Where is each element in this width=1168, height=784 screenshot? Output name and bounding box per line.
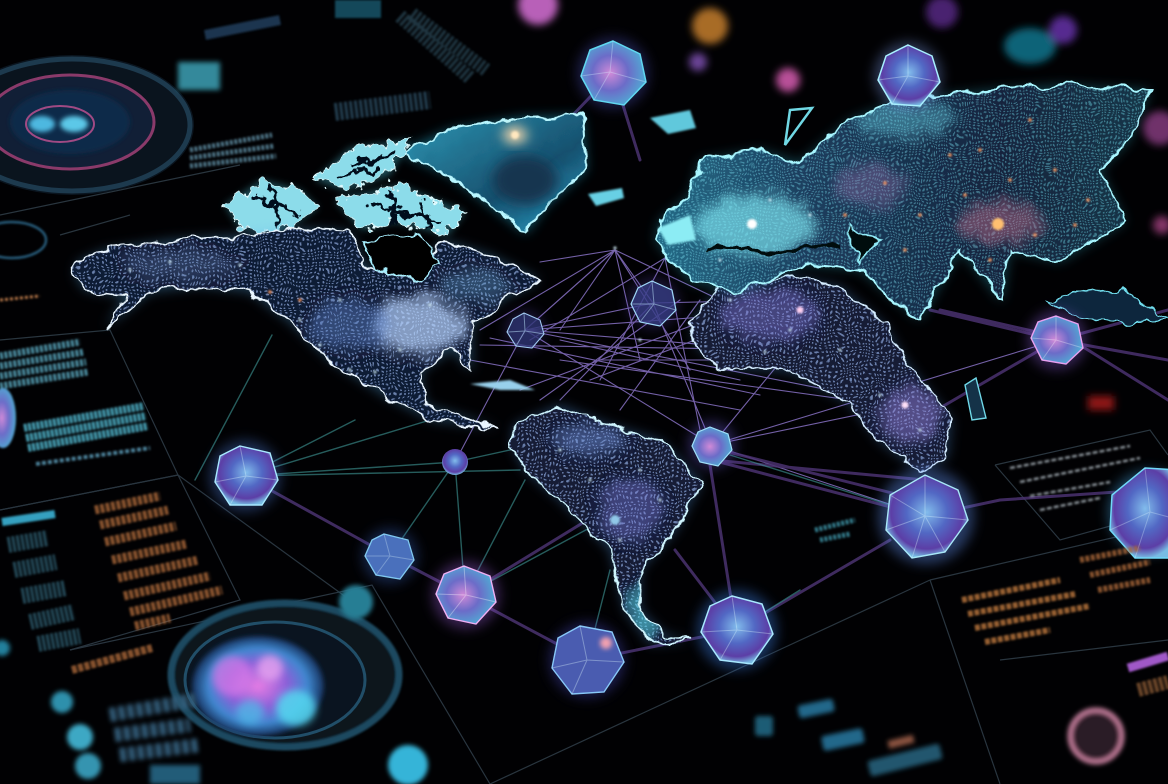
- hub node far right: [1108, 468, 1168, 558]
- top glowing orbs: [518, 0, 1168, 410]
- hub node lower right large: [878, 468, 974, 564]
- hub node bottom centre right: [697, 590, 777, 670]
- lower right data panels: [815, 446, 1168, 690]
- hub node bottom centre: [549, 622, 625, 698]
- continent: Greenland: [400, 116, 586, 233]
- continent: Arctic islands: [225, 140, 465, 235]
- bottom data bars and ring: [755, 698, 1122, 777]
- continent: Eurasia: [650, 80, 1168, 330]
- continent: North America: [70, 220, 550, 435]
- continent: Africa: [685, 270, 986, 480]
- hub node left: [209, 440, 281, 512]
- hub nodes central small: [442, 277, 736, 475]
- city lights: [130, 120, 1088, 540]
- hub node lower left small: [362, 528, 418, 584]
- hub node right: [1027, 310, 1087, 370]
- hub node lower centre pink: [432, 561, 500, 629]
- continent: South America: [505, 400, 705, 650]
- hub node top centre: [577, 37, 649, 109]
- left data panel: cyan text blocks: [0, 342, 150, 464]
- left data panel: orange text blocks: [2, 496, 222, 670]
- bottom left dial with glowing core: [171, 603, 399, 747]
- small islands: [470, 110, 696, 390]
- network connection lines: [195, 73, 1168, 660]
- top left dial gauge: [0, 55, 194, 195]
- bottom left light dots and bars: [0, 585, 428, 784]
- panel grid lines: [0, 165, 1168, 784]
- top left data panels: [0, 0, 486, 300]
- hub node top right: [874, 42, 942, 110]
